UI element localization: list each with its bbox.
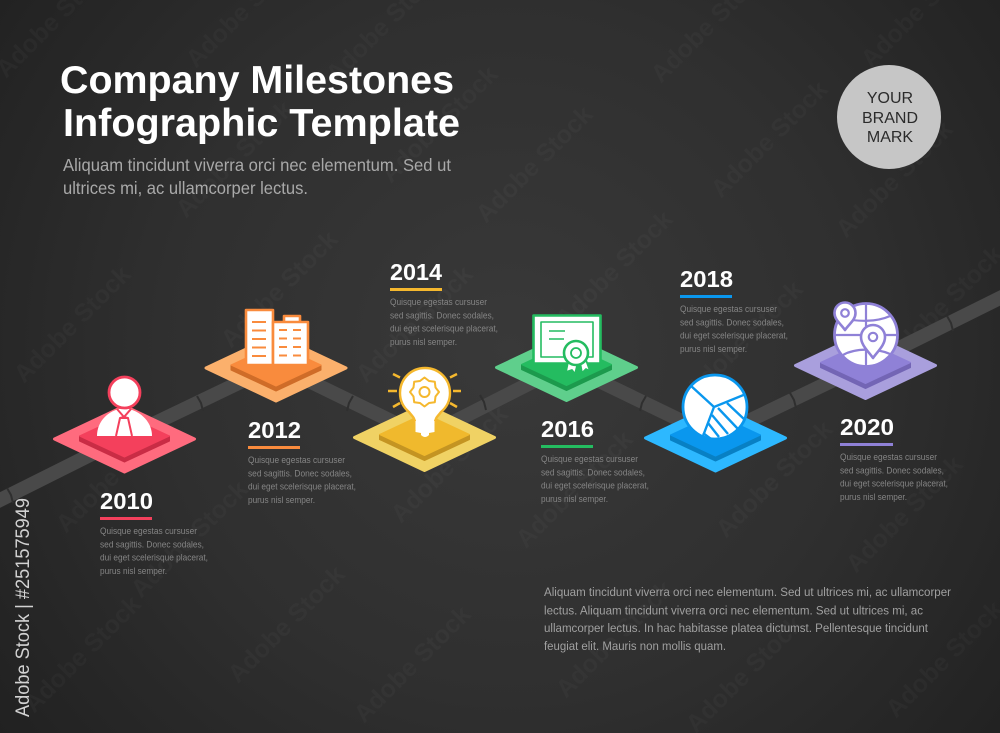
milestone 2020 platform <box>796 332 936 398</box>
text block 2010 <box>100 488 208 576</box>
text block 2016: Quisque egestas cursuser <box>541 454 638 464</box>
icon: office buildings <box>246 310 308 365</box>
icon: light bulb with gear <box>388 368 461 437</box>
milestone 2010 platform <box>54 406 194 472</box>
stock watermark pattern: Adobe Stock <box>8 260 136 388</box>
stock watermark pattern: Adobe Stock <box>550 205 678 333</box>
text block 2018: Quisque egestas cursuser <box>680 304 777 314</box>
brand mark badge <box>837 65 941 169</box>
stock watermark pattern: Adobe Stock <box>510 425 638 553</box>
stock watermark pattern: Adobe Stock <box>385 400 513 528</box>
icon: person <box>97 377 152 436</box>
stock watermark pattern: Adobe Stock <box>170 95 298 223</box>
text block 2018: sed sagittis. Donec sodales, <box>680 317 784 327</box>
stock watermark pattern: Adobe Stock <box>350 260 478 388</box>
text block 2012: purus nisl semper. <box>248 495 315 505</box>
stock watermark pattern: Adobe Stock <box>222 560 350 688</box>
bottom paragraph: ullamcorper lectus. In hac habitasse platea dictumst. Pellentesque tincidunt <box>544 621 929 635</box>
text block 2010: Quisque egestas cursuser <box>100 526 197 536</box>
title: Infographic Template <box>63 102 460 145</box>
milestone 2014 platform <box>354 404 494 470</box>
stock watermark pattern: Adobe Stock <box>125 475 253 603</box>
text block 2020: purus nisl semper. <box>840 492 907 502</box>
milestone 2012 platform <box>206 335 346 401</box>
icon: globe with map pins <box>834 302 898 366</box>
text block 2016: 2016 <box>541 416 594 442</box>
text block 2014: 2014 <box>390 259 442 285</box>
subtitle: ultrices mi, ac ullamcorper lectus. <box>63 178 308 198</box>
text block 2012 <box>248 417 356 505</box>
text block 2018: purus nisl semper. <box>680 344 747 354</box>
stock watermark pattern: Adobe Stock <box>840 450 968 578</box>
stock watermark pattern: Adobe Stock <box>830 115 958 243</box>
side stock label: Adobe Stock | #251575949 <box>13 498 34 717</box>
text block 2020 <box>840 414 948 502</box>
timeline road <box>0 293 1000 505</box>
stock watermark pattern: Adobe Stock <box>705 75 833 203</box>
text block 2012: dui eget scelerisque placerat, <box>248 482 356 492</box>
brand mark badge: BRAND <box>862 110 918 127</box>
title <box>60 59 460 145</box>
stock watermark pattern: Adobe Stock <box>680 275 808 403</box>
text block 2014 <box>390 259 498 347</box>
text block 2020: dui eget scelerisque placerat, <box>840 479 948 489</box>
text block 2016: purus nisl semper. <box>541 494 608 504</box>
text block 2010: dui eget scelerisque placerat, <box>100 553 208 563</box>
milestone 2018 platform <box>646 405 786 471</box>
subtitle <box>63 155 451 198</box>
text block 2014: purus nisl semper. <box>390 337 457 347</box>
stock watermark pattern: Adobe Stock <box>470 100 598 228</box>
text block 2010: purus nisl semper. <box>100 566 167 576</box>
text block 2012: 2012 <box>248 417 301 443</box>
text block 2014: dui eget scelerisque placerat, <box>390 324 498 334</box>
subtitle: Aliquam tincidunt viverra orci nec elementum. Sed ut <box>63 155 451 175</box>
text block 2020: Quisque egestas cursuser <box>840 452 937 462</box>
stock watermark pattern: Adobe Stock <box>550 575 678 703</box>
bottom paragraph: lectus. Aliquam tincidunt viverra orci nec elementum. Sed ut ultrices mi, ac <box>544 604 923 618</box>
text block 2010: 2010 <box>100 488 153 514</box>
bottom paragraph: Aliquam tincidunt viverra orci nec elementum. Sed ut ultrices mi, ac ullamcorper <box>544 585 951 599</box>
text block 2016: sed sagittis. Donec sodales, <box>541 467 645 477</box>
text block 2020: 2020 <box>840 414 894 440</box>
text block 2020: sed sagittis. Donec sodales, <box>840 465 944 475</box>
stock watermark pattern: Adobe Stock <box>348 600 476 728</box>
text block 2014: Quisque egestas cursuser <box>390 297 487 307</box>
milestone 2016 platform <box>496 334 636 400</box>
stock watermark pattern: Adobe Stock <box>215 225 343 353</box>
bottom paragraph <box>544 585 951 653</box>
text block 2018: dui eget scelerisque placerat, <box>680 331 788 341</box>
stock watermark pattern: Adobe Stock <box>18 590 146 718</box>
brand mark badge: MARK <box>867 129 913 146</box>
brand mark badge: YOUR <box>867 90 913 107</box>
text block 2012: Quisque egestas cursuser <box>248 455 345 465</box>
bottom paragraph: feugiat elit. Mauris non mollis quam. <box>544 639 726 653</box>
stock watermark pattern: Adobe Stock <box>375 60 503 188</box>
text block 2014: sed sagittis. Donec sodales, <box>390 310 494 320</box>
title: Company Milestones <box>60 59 454 102</box>
text block 2018 <box>680 266 788 354</box>
text block 2018: 2018 <box>680 266 733 292</box>
stock watermark pattern: Adobe Stock <box>710 415 838 543</box>
text block 2012: sed sagittis. Donec sodales, <box>248 468 352 478</box>
icon: certificate <box>534 316 600 374</box>
stock watermark pattern: Adobe Stock <box>50 410 178 538</box>
icon: pie chart <box>683 375 747 439</box>
text block 2016 <box>541 416 649 504</box>
text block 2010: sed sagittis. Donec sodales, <box>100 539 204 549</box>
text block 2016: dui eget scelerisque placerat, <box>541 481 649 491</box>
